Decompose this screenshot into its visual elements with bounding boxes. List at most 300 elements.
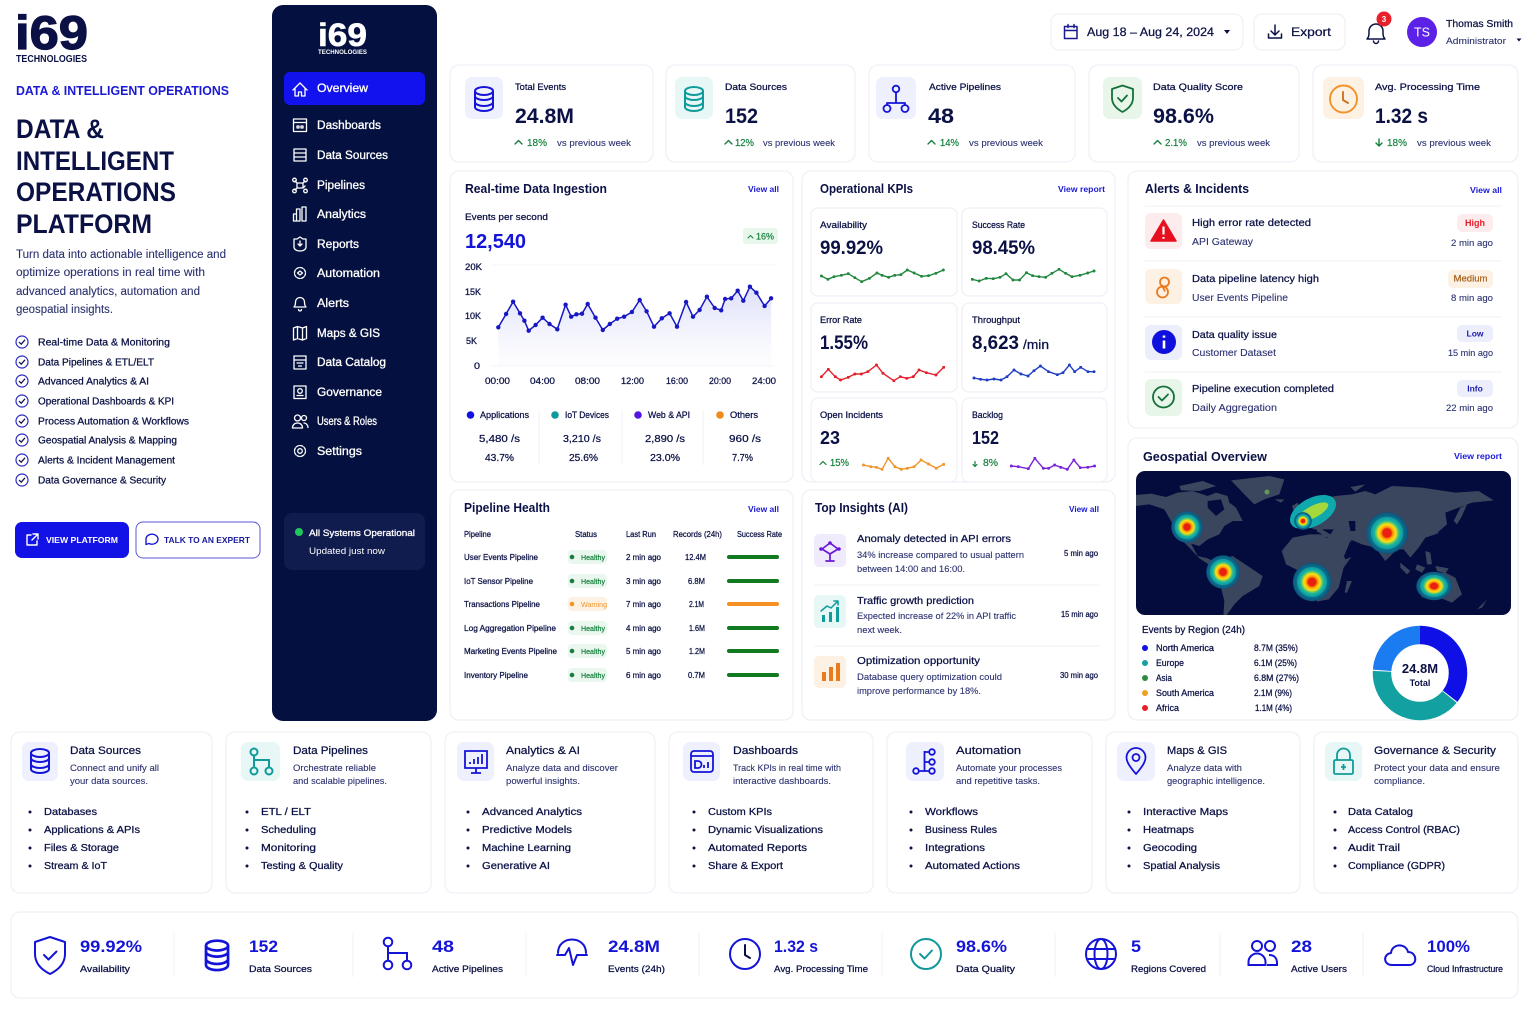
panel: sidebar navigation bbox=[272, 5, 437, 721]
nav item: dashboards bbox=[294, 119, 381, 132]
stat: events 24h: 24.8M bbox=[608, 937, 660, 956]
panel: operational kpis bbox=[802, 171, 1115, 482]
card: analytics and ai capability: Analytics & AI bbox=[506, 745, 580, 757]
export button bbox=[1254, 14, 1345, 50]
table row: transactions bbox=[464, 597, 779, 611]
button: view platform: VIEW PLATFORM bbox=[46, 535, 118, 545]
feature checklist: Process Automation & Workflows bbox=[38, 416, 189, 428]
notification bell: 3 bbox=[1382, 15, 1387, 24]
panel heading: Alerts & Incidents bbox=[1145, 182, 1249, 196]
card: data sources capability: Files & Storage bbox=[44, 843, 119, 854]
tile: availability bbox=[811, 208, 957, 296]
tile: backlog: Backlog bbox=[972, 410, 1003, 420]
table row: inventory: Healthy bbox=[581, 671, 605, 680]
card: analytics and ai capability: Generative AI bbox=[482, 861, 550, 872]
insight: traffic growth: 15 min ago bbox=[1061, 610, 1099, 619]
user profile: TS bbox=[1414, 26, 1430, 40]
card: automation capability: Automation bbox=[956, 745, 1021, 757]
world heatmap bbox=[1136, 471, 1511, 616]
intro text: geospatial insights. bbox=[16, 304, 113, 316]
tile: backlog: 8% bbox=[983, 458, 998, 469]
notification bell bbox=[1367, 12, 1392, 44]
alert: high error rate: 2 min ago bbox=[1451, 238, 1493, 248]
nav item: maps and gis: Maps & GIS bbox=[317, 328, 380, 340]
events by region list: Africa bbox=[1156, 703, 1179, 713]
panel heading: Real-time Data Ingestion bbox=[465, 182, 607, 196]
line chart: events per second: 08:00 bbox=[575, 376, 600, 387]
kpi card: total events: vs previous week bbox=[557, 138, 631, 148]
stat: availability bbox=[35, 937, 142, 974]
card: data pipelines capability: ETL / ELT bbox=[261, 807, 311, 818]
nav item: pipelines bbox=[293, 178, 365, 193]
stat: regions covered: Regions Covered bbox=[1131, 964, 1206, 974]
nav item: dashboards: Dashboards bbox=[317, 120, 381, 132]
card: governance and security capability bbox=[1314, 732, 1518, 893]
insight: anomaly: between 14:00 and 16:00. bbox=[857, 564, 965, 574]
card: data sources capability: Data Sources bbox=[70, 745, 142, 757]
feature checklist: Data Pipelines & ETL/ELT bbox=[38, 358, 154, 368]
stat: processing time: Avg. Processing Time bbox=[774, 964, 868, 974]
nav item: automation bbox=[294, 268, 380, 280]
tile: open incidents: Open Incidents bbox=[820, 410, 884, 420]
donut chart: events total bbox=[1382, 635, 1458, 711]
stat: cloud infrastructure bbox=[1385, 937, 1503, 974]
card: automation capability bbox=[887, 732, 1092, 893]
tile: backlog: 152 bbox=[972, 428, 999, 448]
table row: inventory: 6 min ago bbox=[626, 671, 662, 680]
card: analytics and ai capability: Advanced Analytics bbox=[482, 807, 582, 818]
insight: anomaly: Anomaly detected in API errors bbox=[857, 534, 1011, 545]
card: analytics and ai capability: Machine Learning bbox=[482, 843, 571, 854]
stat: active pipelines bbox=[384, 937, 503, 974]
card: governance and security capability: Compliance (GDPR) bbox=[1348, 861, 1445, 872]
intro text: optimize operations in real time with bbox=[16, 267, 205, 279]
stat: availability: Availability bbox=[80, 964, 130, 974]
card: data pipelines capability bbox=[226, 732, 431, 893]
table header: Pipeline bbox=[464, 530, 492, 539]
kpi card: data quality score: Data Quality Score bbox=[1153, 82, 1243, 93]
table row: transactions: 7 min ago bbox=[626, 600, 662, 609]
legend: traffic sources: Web & API bbox=[648, 410, 690, 420]
export button: Export bbox=[1291, 25, 1332, 39]
nav item: data catalog bbox=[294, 356, 386, 369]
table row: log aggregation: 4 min ago bbox=[626, 624, 662, 633]
card: analytics and ai capability: powerful insights. bbox=[506, 776, 580, 786]
alert: pipeline completed: Pipeline execution completed bbox=[1192, 383, 1334, 395]
tile: success rate: 98.45% bbox=[972, 238, 1035, 259]
system status box bbox=[284, 513, 425, 570]
alert: data quality: Data quality issue bbox=[1192, 329, 1277, 341]
stat: active users: Active Users bbox=[1291, 964, 1347, 974]
card: maps and gis capability: Heatmaps bbox=[1143, 825, 1194, 836]
card: dashboards capability: Dashboards bbox=[733, 745, 799, 757]
card: maps and gis capability: geographic intelligence. bbox=[1167, 776, 1265, 786]
line chart: events per second: 12:00 bbox=[621, 376, 644, 387]
events by region list bbox=[1142, 625, 1299, 713]
events by region list: Asia bbox=[1156, 673, 1172, 683]
line chart: events per second: 20K bbox=[465, 262, 482, 272]
stat: active pipelines: Active Pipelines bbox=[432, 964, 503, 974]
kpi card: total events: Total Events bbox=[515, 82, 566, 93]
kpi card: data sources: 152 bbox=[725, 105, 758, 128]
card: dashboards capability bbox=[669, 732, 873, 893]
alert: high error rate: API Gateway bbox=[1192, 237, 1253, 248]
card: governance and security capability: compliance. bbox=[1374, 776, 1425, 786]
main title: OPERATIONS bbox=[16, 177, 176, 207]
kpi card: data quality score: vs previous week bbox=[1197, 138, 1270, 148]
events per second value: 12,540 bbox=[465, 231, 526, 253]
events by region list: 6.8M (27%) bbox=[1254, 673, 1299, 683]
panel: geospatial overview bbox=[1128, 438, 1518, 720]
kpi card: data sources: vs previous week bbox=[763, 138, 835, 148]
tile: throughput: /min bbox=[1023, 338, 1049, 352]
legend: traffic sources: 25.6% bbox=[569, 452, 598, 464]
table row: user events: User Events Pipeline bbox=[464, 553, 539, 562]
card: dashboards capability: Automated Reports bbox=[708, 843, 807, 854]
card: data pipelines capability: Monitoring bbox=[261, 843, 316, 854]
card: maps and gis capability: Maps & GIS bbox=[1167, 745, 1227, 757]
card: data pipelines capability: Data Pipelines bbox=[293, 745, 369, 757]
kpi card: total events: 24.8M bbox=[515, 105, 574, 128]
tile: throughput bbox=[962, 303, 1107, 392]
card: data pipelines capability: Orchestrate reliable bbox=[293, 763, 376, 773]
card: dashboards capability: Custom KPIs bbox=[708, 807, 772, 818]
table row: iot sensor: 6.8M bbox=[688, 577, 705, 586]
card: data pipelines capability: and scalable pipelines. bbox=[293, 776, 387, 786]
main title: INTELLIGENT bbox=[16, 146, 174, 176]
view report link: View report bbox=[1454, 451, 1502, 461]
kpi card: total events: 18% bbox=[527, 137, 547, 149]
system status box: All Systems Operational bbox=[309, 528, 415, 539]
legend: traffic sources: 960 /s bbox=[729, 433, 761, 445]
nav item: data catalog: Data Catalog bbox=[317, 357, 386, 369]
eyebrow heading: DATA & INTELLIGENT OPERATIONS bbox=[16, 84, 229, 98]
nav item: settings: Settings bbox=[317, 446, 362, 458]
line chart: events per second: 04:00 bbox=[530, 376, 555, 387]
card: analytics and ai capability: Analyze data and discover bbox=[506, 763, 618, 773]
donut chart: events total: 24.8M bbox=[1402, 661, 1438, 676]
insight: traffic growth: Traffic growth prediction bbox=[857, 596, 974, 607]
stat: regions covered bbox=[1086, 937, 1206, 974]
kpi card: data sources: Data Sources bbox=[725, 82, 787, 93]
kpi card: avg processing time: vs previous week bbox=[1417, 138, 1491, 148]
alert: high error rate: High bbox=[1465, 218, 1485, 228]
kpi card: data quality score: 98.6% bbox=[1153, 105, 1214, 128]
card: maps and gis capability bbox=[1106, 732, 1300, 893]
kpi card: active pipelines: vs previous week bbox=[969, 138, 1043, 148]
card: automation capability: Integrations bbox=[925, 843, 985, 854]
tile: open incidents bbox=[811, 398, 957, 482]
panel heading: Operational KPIs bbox=[820, 182, 913, 196]
feature checklist: Data Governance & Security bbox=[38, 476, 166, 486]
nav item: reports bbox=[294, 237, 359, 251]
tile: availability: Availability bbox=[820, 220, 868, 230]
main title bbox=[16, 114, 176, 239]
nav item: alerts bbox=[294, 298, 349, 311]
table row: iot sensor bbox=[464, 574, 779, 588]
card: data sources capability: Databases bbox=[44, 807, 97, 818]
kpi card: avg processing time: 1.32 s bbox=[1375, 105, 1428, 128]
kpi card: data quality score: 2.1% bbox=[1165, 137, 1187, 149]
legend: traffic sources: 23.0% bbox=[650, 452, 680, 464]
view all link: View all bbox=[748, 504, 779, 514]
line chart: events per second: 20:00 bbox=[709, 376, 731, 387]
card: automation capability: Automate your processes bbox=[956, 763, 1063, 773]
button: talk to an expert bbox=[136, 522, 260, 558]
panel heading: Pipeline Health bbox=[464, 501, 550, 515]
feature checklist: Geospatial Analysis & Mapping bbox=[38, 436, 177, 446]
feature checklist: Real-time Data & Monitoring bbox=[38, 338, 170, 348]
insight: traffic growth: next week. bbox=[857, 625, 902, 635]
line chart: events per second bbox=[465, 262, 776, 387]
nav item: pipelines: Pipelines bbox=[317, 180, 365, 192]
alert: pipeline latency bbox=[1145, 269, 1493, 304]
alert: pipeline completed: 22 min ago bbox=[1446, 403, 1493, 413]
nav item: data sources: Data Sources bbox=[317, 150, 388, 162]
card: maps and gis capability: Analyze data with bbox=[1167, 763, 1242, 773]
events per second value: Events per second bbox=[465, 212, 548, 223]
alert: high error rate bbox=[1145, 213, 1493, 249]
card: data pipelines capability: Testing & Quality bbox=[261, 861, 343, 872]
kpi card: active pipelines bbox=[869, 65, 1075, 162]
insight: optimization: 30 min ago bbox=[1060, 671, 1099, 680]
table header bbox=[464, 530, 782, 539]
nav item: analytics bbox=[294, 207, 366, 221]
card: analytics and ai capability bbox=[445, 732, 655, 893]
card: automation capability: and repetitive tasks. bbox=[956, 776, 1040, 786]
alert: pipeline latency: 8 min ago bbox=[1451, 293, 1493, 303]
alert: pipeline completed bbox=[1145, 379, 1493, 416]
view report link: View report bbox=[1058, 184, 1105, 194]
card: analytics and ai capability: Predictive Models bbox=[482, 825, 572, 836]
table row: user events: 2 min ago bbox=[626, 553, 662, 562]
nav item: data sources bbox=[294, 149, 388, 162]
kpi card: avg processing time: Avg. Processing Time bbox=[1375, 82, 1480, 93]
donut chart: events total: Total bbox=[1410, 678, 1430, 688]
feature checklist: Operational Dashboards & KPI bbox=[38, 396, 174, 408]
table header: Records (24h) bbox=[673, 530, 722, 539]
tile: throughput: Throughput bbox=[972, 315, 1021, 325]
card: data sources capability bbox=[11, 732, 212, 893]
events by region list: Events by Region (24h) bbox=[1142, 625, 1245, 636]
brand logo: TECHNOLOGIES bbox=[16, 54, 87, 65]
legend: traffic sources: Applications bbox=[480, 410, 530, 420]
button: talk to an expert: TALK TO AN EXPERT bbox=[164, 535, 251, 545]
stat: data quality: Data Quality bbox=[956, 964, 1015, 974]
events by region list: North America bbox=[1156, 643, 1214, 653]
tile: open incidents: 15% bbox=[830, 458, 849, 469]
table row: log aggregation: Healthy bbox=[581, 624, 605, 633]
date range picker bbox=[1051, 14, 1243, 50]
nav item: overview active bbox=[284, 72, 425, 105]
stat: availability: 99.92% bbox=[80, 937, 142, 956]
stat: active pipelines: 48 bbox=[432, 937, 454, 956]
line chart: events per second: 10K bbox=[465, 311, 481, 321]
table row: iot sensor: IoT Sensor Pipeline bbox=[464, 577, 534, 586]
table row: inventory: Inventory Pipeline bbox=[464, 671, 529, 680]
insight: optimization bbox=[814, 656, 1099, 696]
card: dashboards capability: Share & Export bbox=[708, 861, 783, 872]
card: maps and gis capability: Geocoding bbox=[1143, 843, 1197, 854]
stat: data quality bbox=[911, 937, 1015, 974]
insight: traffic growth: Expected increase of 22% in API traffic bbox=[857, 611, 1017, 621]
panel: pipeline health bbox=[450, 490, 793, 720]
insight: optimization: Optimization opportunity bbox=[857, 656, 980, 667]
table row: marketing events bbox=[464, 644, 779, 658]
panel: summary stats strip bbox=[11, 912, 1518, 998]
stat: cloud infrastructure: 100% bbox=[1427, 937, 1470, 956]
legend: traffic sources: 43.7% bbox=[485, 452, 514, 464]
card: governance and security capability: Data Catalog bbox=[1348, 807, 1413, 818]
kpi card: data sources: 12% bbox=[735, 137, 754, 149]
growth badge bbox=[743, 228, 778, 244]
kpi card: active pipelines: 14% bbox=[940, 137, 959, 149]
alert: pipeline completed: Daily Aggregation bbox=[1192, 403, 1277, 414]
card: data sources capability: Stream & IoT bbox=[44, 861, 107, 872]
button: view platform bbox=[15, 522, 129, 558]
alert: pipeline latency: User Events Pipeline bbox=[1192, 293, 1288, 304]
table row: marketing events: Healthy bbox=[581, 647, 605, 656]
alert: data quality: Low bbox=[1466, 328, 1484, 338]
nav item: users and roles bbox=[292, 415, 377, 428]
table row: log aggregation: 1.6M bbox=[689, 624, 705, 633]
panel heading: Geospatial Overview bbox=[1143, 450, 1267, 464]
nav item: governance bbox=[294, 386, 382, 399]
kpi card: data sources bbox=[666, 65, 855, 162]
insight: anomaly: 34% increase compared to usual pattern bbox=[857, 550, 1024, 560]
tile: backlog bbox=[962, 398, 1107, 482]
table row: marketing events: 1.2M bbox=[689, 647, 705, 656]
card: dashboards capability: Track KPIs in real time with bbox=[733, 763, 841, 773]
card: automation capability: Automated Actions bbox=[925, 861, 1020, 872]
stat: active users: 28 bbox=[1291, 937, 1312, 956]
card: governance and security capability: Access Control (RBAC) bbox=[1348, 825, 1460, 836]
events by region list: 6.1M (25%) bbox=[1254, 658, 1297, 668]
table row: user events: Healthy bbox=[581, 553, 605, 562]
table header: Last Run bbox=[626, 530, 656, 539]
insight: optimization: improve performance by 18%. bbox=[857, 686, 981, 696]
legend: traffic sources: 2,890 /s bbox=[645, 433, 685, 445]
tile: error rate: Error Rate bbox=[820, 315, 862, 325]
nav item: analytics: Analytics bbox=[317, 209, 366, 221]
table header: Success Rate bbox=[737, 530, 782, 539]
table row: inventory: 0.7M bbox=[688, 671, 705, 680]
user profile: Administrator bbox=[1446, 36, 1506, 47]
table row: user events: 12.4M bbox=[685, 553, 706, 562]
kpi card: total events bbox=[450, 65, 653, 162]
stat: cloud infrastructure: Cloud Infrastructure bbox=[1427, 964, 1503, 974]
stat: processing time bbox=[730, 937, 868, 974]
kpi card: active pipelines: Active Pipelines bbox=[929, 82, 1001, 93]
table row: transactions: 2.1M bbox=[689, 600, 704, 609]
intro text: advanced analytics, automation and bbox=[16, 286, 200, 298]
alert: data quality: 15 min ago bbox=[1448, 348, 1493, 358]
line chart: events per second: 16:00 bbox=[666, 376, 688, 387]
events by region list: 8.7M (35%) bbox=[1254, 643, 1298, 653]
card: maps and gis capability: Spatial Analysis bbox=[1143, 861, 1220, 872]
brand logo: i69 bbox=[15, 6, 88, 59]
view all link: View all bbox=[1069, 504, 1099, 514]
stat: data sources bbox=[206, 937, 312, 974]
legend: traffic sources: IoT Devices bbox=[565, 410, 609, 420]
alert: pipeline latency: Data pipeline latency high bbox=[1192, 273, 1319, 285]
tile: error rate bbox=[811, 303, 957, 392]
table row: transactions: Transactions Pipeline bbox=[464, 600, 541, 609]
sidebar logo: i69 bbox=[318, 17, 367, 53]
main title: DATA & bbox=[16, 114, 104, 144]
legend: traffic sources: 3,210 /s bbox=[563, 433, 601, 445]
events by region list: South America bbox=[1156, 688, 1214, 698]
nav item: overview active: Overview bbox=[317, 83, 369, 95]
insight: traffic growth bbox=[814, 595, 1099, 635]
card: data pipelines capability: Scheduling bbox=[261, 825, 316, 836]
sidebar logo: TECHNOLOGIES bbox=[318, 49, 368, 56]
panel: real-time data ingestion bbox=[450, 171, 793, 482]
card: maps and gis capability: Interactive Maps bbox=[1143, 807, 1228, 818]
nav item: reports: Reports bbox=[317, 239, 359, 251]
stat: data quality: 98.6% bbox=[956, 937, 1007, 956]
panel: alerts and incidents bbox=[1128, 171, 1518, 428]
line chart: events per second: 0 bbox=[474, 361, 480, 371]
user profile bbox=[1407, 17, 1522, 47]
card: data sources capability: your data sources. bbox=[70, 776, 148, 786]
table row: marketing events: 5 min ago bbox=[626, 647, 662, 656]
growth badge: 16% bbox=[756, 232, 774, 242]
nav item: automation: Automation bbox=[317, 268, 380, 280]
tile: success rate: Success Rate bbox=[972, 220, 1025, 230]
events by region list: 1.1M (4%) bbox=[1255, 703, 1292, 713]
table row: iot sensor: Healthy bbox=[581, 577, 605, 586]
tile: open incidents: 23 bbox=[820, 428, 840, 448]
table row: log aggregation bbox=[464, 621, 779, 635]
tile: success rate bbox=[962, 208, 1107, 296]
kpi card: avg processing time bbox=[1313, 65, 1518, 162]
insight: anomaly bbox=[814, 534, 1099, 574]
card: data sources capability: Applications & APIs bbox=[44, 825, 140, 836]
alert: data quality: Customer Dataset bbox=[1192, 348, 1276, 359]
events by region list: 2.1M (9%) bbox=[1254, 688, 1292, 698]
intro text bbox=[16, 249, 226, 316]
table row: marketing events: Marketing Events Pipeline bbox=[464, 647, 558, 656]
stat: events 24h bbox=[557, 937, 665, 974]
legend: traffic sources: 5,480 /s bbox=[479, 433, 520, 445]
line chart: events per second: 24:00 bbox=[752, 376, 776, 387]
table header: Status bbox=[575, 530, 597, 539]
alert: data quality bbox=[1145, 325, 1493, 360]
panel: top insights bbox=[802, 490, 1115, 720]
nav item: alerts: Alerts bbox=[317, 298, 349, 310]
system status box: Updated just now bbox=[309, 546, 385, 557]
insight: optimization: Database query optimization could bbox=[857, 672, 1002, 682]
alert: pipeline completed: Info bbox=[1467, 384, 1483, 394]
card: data sources capability: Connect and unify all bbox=[70, 763, 159, 773]
tile: throughput: 8,623 bbox=[972, 333, 1019, 354]
stat: active users bbox=[1248, 937, 1347, 974]
table row: log aggregation: Log Aggregation Pipeline bbox=[464, 624, 557, 633]
tile: error rate: 1.55% bbox=[820, 333, 868, 354]
line chart: events per second: 5K bbox=[466, 336, 477, 346]
legend: traffic sources: 7.7% bbox=[732, 452, 753, 464]
nav item: maps and gis bbox=[294, 326, 380, 340]
tile: availability: 99.92% bbox=[820, 238, 883, 259]
nav item: settings bbox=[294, 446, 362, 458]
legend: traffic sources: Others bbox=[730, 410, 759, 420]
date range picker: Aug 18 – Aug 24, 2024 bbox=[1087, 25, 1214, 39]
events by region list: Europe bbox=[1156, 658, 1184, 668]
table row: inventory bbox=[464, 668, 779, 682]
card: governance and security capability: Audit Trail bbox=[1348, 843, 1400, 854]
feature checklist: Alerts & Incident Management bbox=[38, 456, 175, 466]
